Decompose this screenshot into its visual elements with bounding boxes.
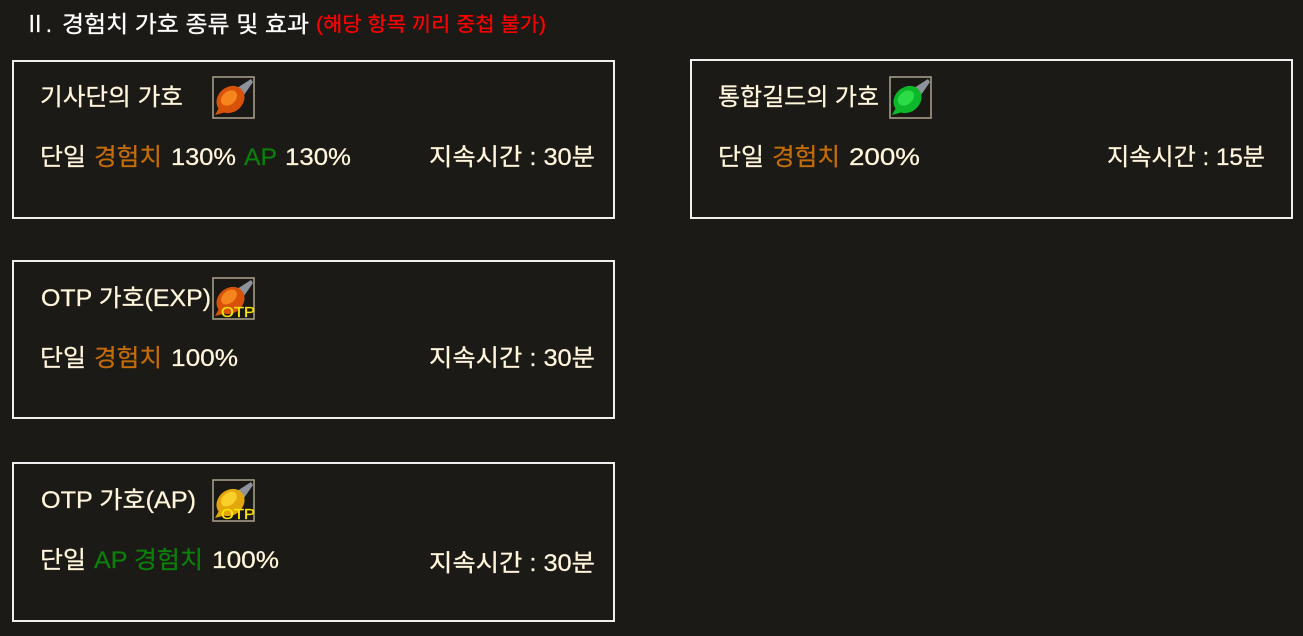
effect text [40, 144, 351, 171]
title: Ⅱ. [24, 11, 52, 37]
effect text [40, 547, 279, 574]
effect text [40, 345, 238, 372]
duration: 지속시간 : 30분 [429, 550, 595, 577]
title [24, 11, 546, 37]
effect text: 100% [212, 547, 279, 574]
panel heading: OTP 가호(EXP) [41, 285, 211, 312]
icon: yellow OTP seed [211, 480, 255, 523]
effect text: 단일 [718, 144, 764, 171]
icon: orange OTP seed [211, 278, 255, 321]
effect text [718, 144, 920, 171]
effect text: 200% [849, 144, 920, 171]
effect text: 단일 [40, 345, 86, 372]
panel: OTP EXP blessing [13, 261, 614, 418]
icon: orange OTP seed: OTP [221, 304, 255, 321]
panel heading: 통합길드의 가호 [718, 84, 879, 111]
effect text: 경험치 [772, 144, 840, 171]
effect text: AP [244, 144, 277, 171]
panel: OTP AP blessing [13, 463, 614, 621]
duration: 지속시간 : 15분 [1107, 144, 1265, 171]
effect text: 경험치 [94, 345, 162, 372]
icon: orange seed [211, 77, 254, 119]
panel heading: OTP 가호(AP) [41, 487, 196, 514]
panel heading: 기사단의 가호 [40, 84, 183, 111]
warning note: (해당 항목 끼리 중첩 불가) [316, 13, 546, 36]
panel: knights blessing [13, 61, 614, 218]
duration: 지속시간 : 30분 [429, 144, 595, 171]
icon: yellow OTP seed: OTP [221, 506, 255, 523]
effect text: 130% [171, 144, 236, 171]
effect text: 단일 [40, 144, 86, 171]
effect text: AP 경험치 [94, 547, 203, 574]
icon: green seed [888, 77, 931, 119]
panel: guild blessing [691, 60, 1292, 218]
duration: 지속시간 : 30분 [429, 345, 595, 372]
effect text: 단일 [40, 547, 86, 574]
effect text: 130% [285, 144, 351, 171]
effect text: 100% [171, 345, 238, 372]
title: 경험치 가호 종류 및 효과 [62, 11, 309, 37]
effect text: 경험치 [94, 144, 162, 171]
